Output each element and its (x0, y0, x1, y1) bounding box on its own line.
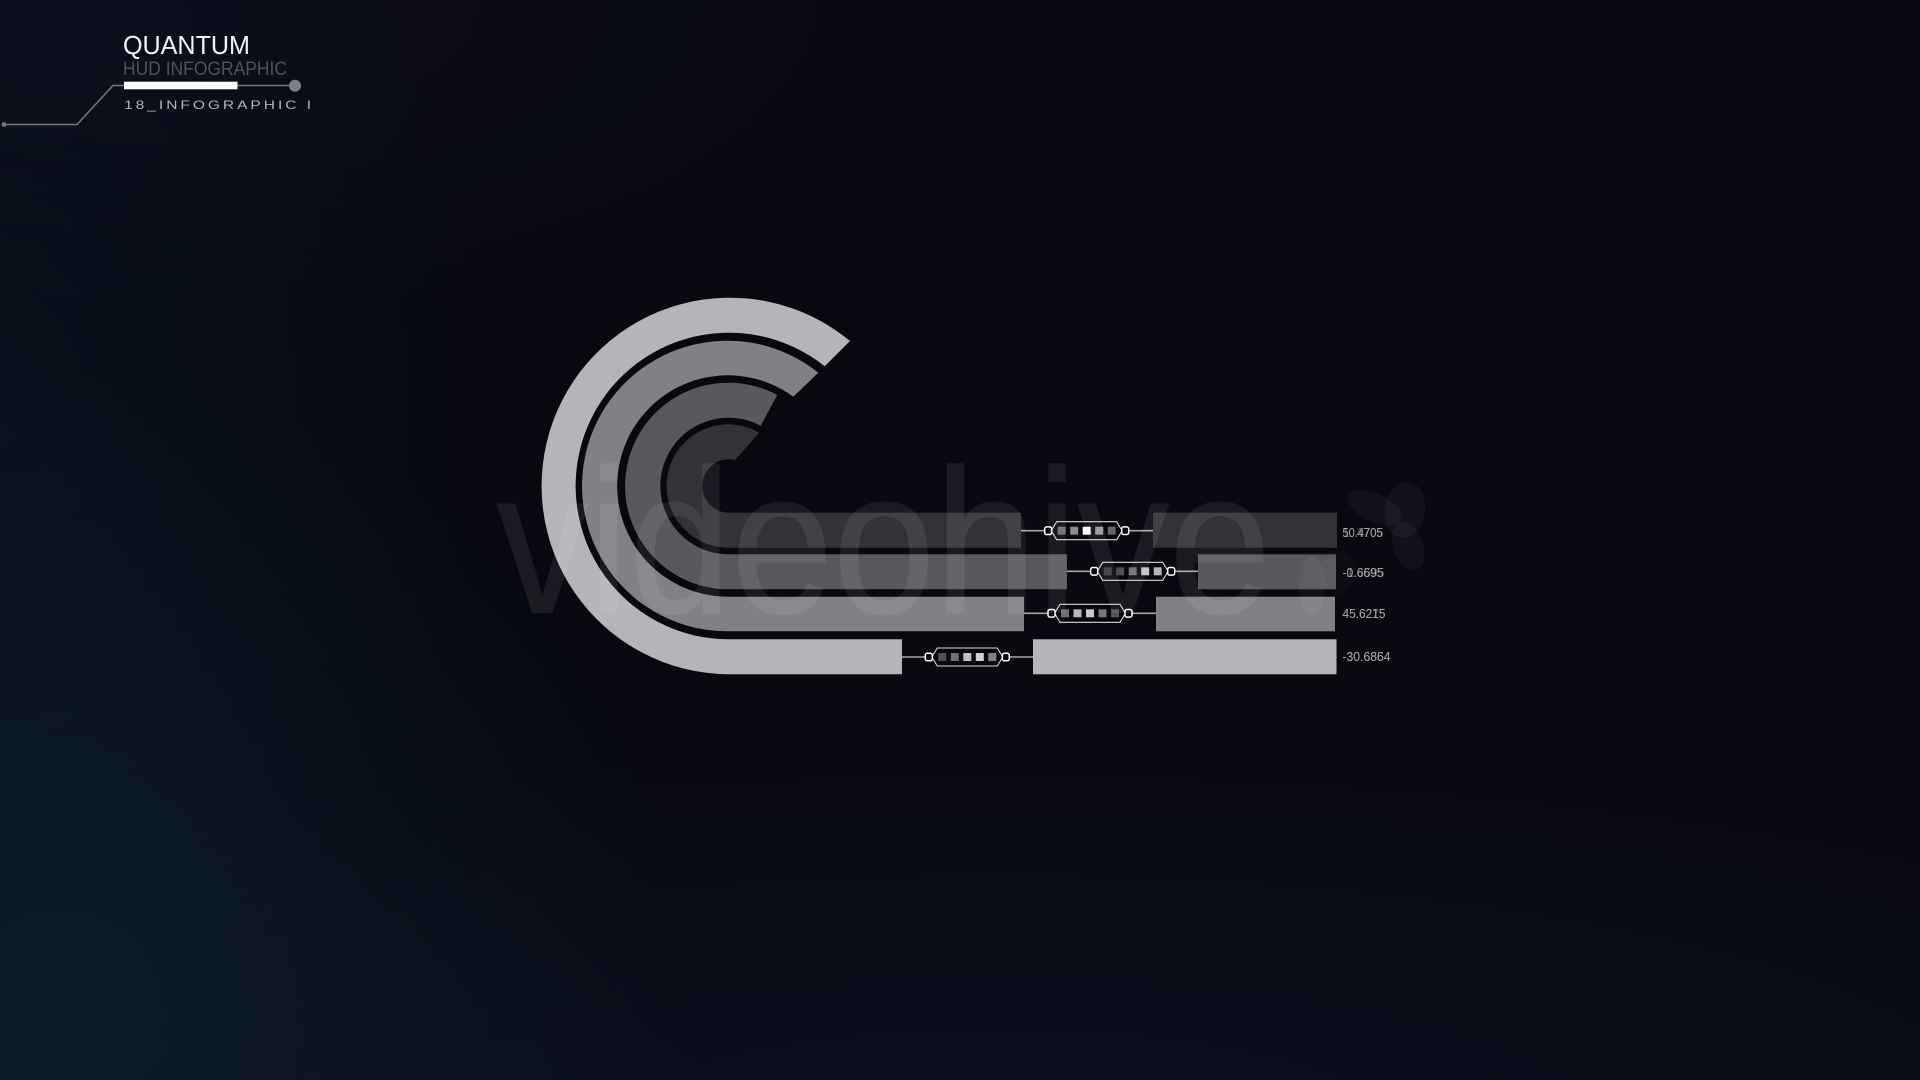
connector capsule row 1 (1021, 522, 1153, 540)
value row 4: -30.6864 (1342, 650, 1391, 664)
circuit line with end dots (2, 80, 301, 127)
header block (2, 32, 311, 127)
subtitle: HUD INFOGRAPHIC: HUD INFOGRAPHIC (123, 58, 287, 80)
connector capsule row 4 (902, 648, 1033, 666)
value row 1: 50.4705 (1342, 526, 1383, 540)
white progress bar (124, 82, 238, 89)
title: QUANTUM: QUANTUM (123, 32, 250, 60)
value row 3: 45.6275 (1342, 607, 1386, 621)
value row 3: 45.6215 (1342, 607, 1386, 621)
value row 2: -0.6695 (1342, 566, 1384, 580)
value row 4: -30.6854 (1342, 650, 1391, 664)
watermark text: videohive: videohive (497, 428, 1271, 656)
value labels (1342, 526, 1391, 664)
value row 2: -1.6595 (1342, 566, 1385, 580)
value row 1: 1. 4705 (1342, 526, 1384, 540)
watermark logo petals (1299, 479, 1431, 616)
connector capsule row 3 (1024, 604, 1156, 622)
caption: 18_INFOGRAPHIC I: 18_INFOGRAPHIC I (124, 99, 311, 112)
arc bar 1: outer light ring (542, 298, 1336, 674)
chart: concentric arc bars (542, 298, 1337, 674)
arc bar 2: mid-light ring (582, 341, 1335, 631)
arc bar 4: inner dark ring (667, 424, 1337, 548)
connector capsule row 2 (1067, 562, 1198, 580)
arc bar 3: mid-dark ring (625, 383, 1336, 589)
